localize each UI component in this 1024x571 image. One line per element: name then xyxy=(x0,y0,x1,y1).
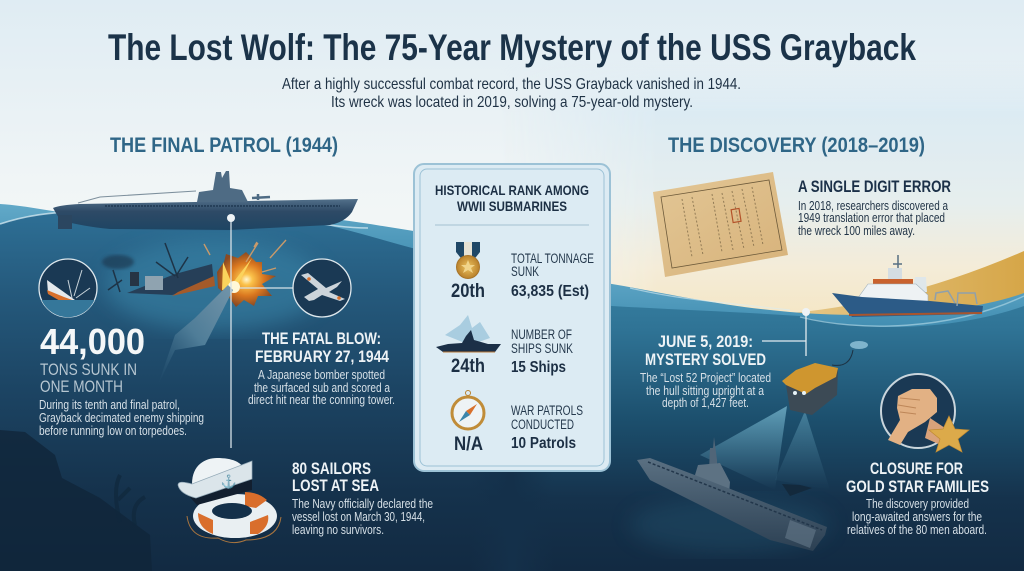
rank row: patrols: N/A xyxy=(454,434,483,455)
icon: coral xyxy=(116,475,145,525)
icon: sailor hat and life ring xyxy=(178,458,281,543)
icon: gold star xyxy=(929,416,969,452)
text block: closure: The discovery provided xyxy=(866,496,969,511)
stat: 44,000 tons: TONS SUNK IN xyxy=(40,360,137,379)
icon: sailor hat and life ring: ⚓ xyxy=(221,474,237,489)
stat: 44,000 tons: Grayback decimated enemy shipping xyxy=(39,410,204,425)
text block: closure: GOLD STAR FAMILIES xyxy=(846,477,989,496)
rank row: tonnage: 20th xyxy=(451,281,485,302)
rank row: ships: SHIPS SUNK xyxy=(511,341,573,356)
text block: a single digit error xyxy=(798,177,951,238)
text block: mystery solved: JUNE 5, 2019: xyxy=(658,332,753,351)
text block: mystery solved: The “Lost 52 Project” located xyxy=(640,370,771,385)
heading: the discovery: THE DISCOVERY (2018–2019) xyxy=(668,134,925,157)
subtitle: After a highly successful combat record, the USS Grayback vanished in 1944. xyxy=(282,76,741,93)
text block: the fatal blow xyxy=(248,329,395,407)
text block: the fatal blow: direct hit near the conning tower. xyxy=(248,392,395,407)
text block: closure: relatives of the 80 men aboard. xyxy=(847,522,987,537)
text block: the fatal blow: A Japanese bomber spotted xyxy=(258,367,385,382)
rank row: patrols: CONDUCTED xyxy=(511,417,574,432)
text block: the fatal blow: the surfaced sub and scored a xyxy=(254,380,391,395)
text block: 80 sailors xyxy=(292,459,433,537)
text block: closure xyxy=(846,459,989,537)
rank row: patrols xyxy=(454,403,583,455)
text block: 80 sailors: vessel lost on March 30, 1944, xyxy=(292,509,425,524)
stat: 44,000 tons: During its tenth and final patrol, xyxy=(39,397,180,412)
subtitle xyxy=(282,76,741,111)
illustration: ROV xyxy=(782,341,868,415)
illustration: translation document xyxy=(653,172,788,277)
connector lines: right timeline xyxy=(762,308,810,356)
text block: a single digit error: A SINGLE DIGIT ERROR xyxy=(798,177,951,196)
panel heading xyxy=(435,182,589,214)
text block: mystery solved: MYSTERY SOLVED xyxy=(645,350,766,369)
panel heading: WWII SUBMARINES xyxy=(457,198,567,214)
icon: warship xyxy=(436,315,501,352)
text block: the fatal blow: FEBRUARY 27, 1944 xyxy=(255,347,389,366)
icon: medal xyxy=(456,242,480,278)
text block: a single digit error: the wreck 100 miles away. xyxy=(798,223,915,238)
illustration: wreck on seabed xyxy=(637,437,827,551)
rank row: ships: NUMBER OF xyxy=(511,327,572,342)
text block: mystery solved: the hull sitting upright at a xyxy=(646,383,765,398)
text block: 80 sailors: LOST AT SEA xyxy=(292,476,379,495)
text block: closure: CLOSURE FOR xyxy=(870,459,963,478)
icon: sinking ship medallion xyxy=(39,259,97,317)
stat: 44,000 tons: before running low on torpedoes. xyxy=(39,423,187,438)
illustration: sinking ship and explosion xyxy=(102,240,286,385)
rank row: tonnage: TOTAL TONNAGE xyxy=(511,251,594,266)
panel heading: HISTORICAL RANK AMONG xyxy=(435,182,589,198)
stat: 44,000 tons: 44,000 xyxy=(40,321,145,362)
text block: a single digit error: 1949 translation error that placed xyxy=(798,210,945,225)
text block: mystery solved: depth of 1,427 feet. xyxy=(662,395,749,410)
rank row: tonnage: SUNK xyxy=(511,264,539,279)
heading: the final patrol: THE FINAL PATROL (1944) xyxy=(110,134,338,157)
icon: bomber medallion xyxy=(293,259,351,317)
illustration: light beams xyxy=(700,406,830,490)
illustration: surfaced submarine xyxy=(53,171,358,230)
icon: clasped hands medallion xyxy=(881,374,955,448)
text block: 80 sailors: 80 SAILORS xyxy=(292,459,371,478)
text block: closure: long-awaited answers for the xyxy=(852,509,982,524)
text block: 80 sailors: The Navy officially declared the xyxy=(292,496,433,511)
rank row: ships: 24th xyxy=(451,356,485,377)
subtitle: Its wreck was located in 2019, solving a 75-year-old mystery. xyxy=(331,94,693,111)
text block: 80 sailors: leaving no survivors. xyxy=(292,522,384,537)
rank row: tonnage: 63,835 (Est) xyxy=(511,283,589,300)
rank row: ships: 15 Ships xyxy=(511,359,566,376)
rank row: patrols: 10 Patrols xyxy=(511,435,576,452)
text block: mystery solved xyxy=(640,332,771,410)
stat: 44,000 tons xyxy=(39,321,204,438)
panel: historical rank xyxy=(414,164,610,471)
text block: a single digit error: In 2018, researchers discovered a xyxy=(798,198,949,213)
connector lines: left timeline xyxy=(227,214,295,448)
text block: the fatal blow: THE FATAL BLOW: xyxy=(262,329,381,348)
illustration: research vessel xyxy=(832,255,983,317)
rank row: tonnage xyxy=(451,251,594,302)
stat: 44,000 tons: ONE MONTH xyxy=(40,377,123,396)
rank row: ships xyxy=(451,327,573,377)
rank row: patrols: WAR PATROLS xyxy=(511,403,583,418)
icon: compass xyxy=(452,390,484,429)
